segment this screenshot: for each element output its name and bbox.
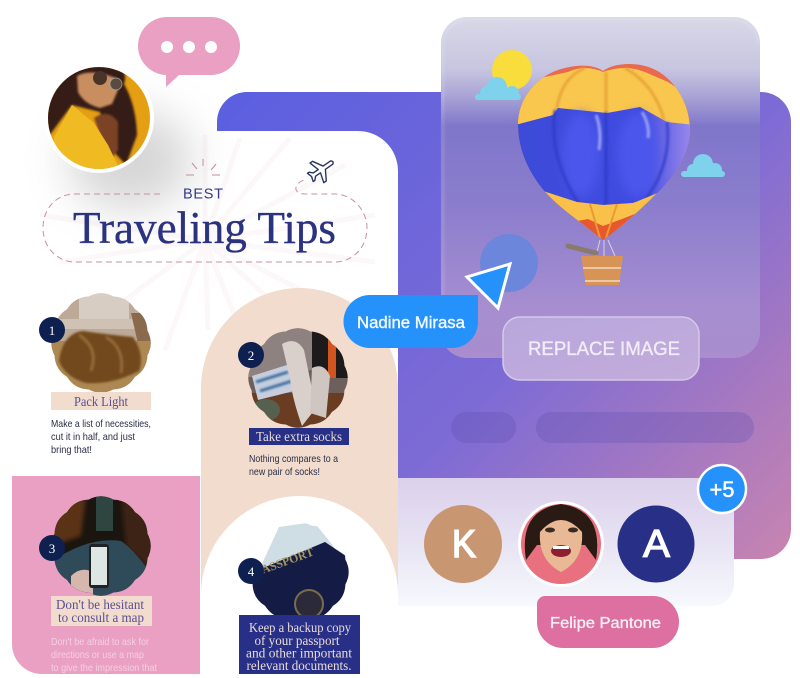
description: Don't be afraid to ask for	[51, 636, 149, 648]
label: keep a backup copy	[239, 615, 360, 674]
title sparkle	[186, 159, 220, 175]
description: bring that!	[51, 444, 92, 456]
panel: collaborators strip	[398, 478, 734, 606]
panel: pink tip background	[12, 476, 200, 674]
tip 4: backup passport	[238, 516, 360, 674]
number badge 1	[39, 317, 65, 343]
avatar: A: A	[643, 523, 670, 566]
description: new pair of socks!	[249, 466, 320, 478]
number badge 2: 2	[248, 348, 254, 363]
placeholder pill long	[536, 412, 754, 443]
label: pack light: Pack Light	[74, 394, 128, 409]
tip 3: consult a map	[39, 490, 157, 674]
telescope	[568, 246, 596, 253]
heading: traveling tips: Traveling Tips	[73, 202, 336, 253]
avatar: woman in yellow jacket	[44, 63, 154, 173]
icon: chat bubble	[138, 17, 240, 87]
sunburst rays behind title	[40, 135, 375, 350]
label: consult a map: Don't be hesitant	[56, 597, 144, 612]
name tag: nadine mirasa: Nadine Mirasa	[357, 313, 466, 332]
heading: best: BEST	[183, 186, 223, 202]
photo: phone on forest road	[54, 496, 151, 596]
description: Make a list of necessities,	[51, 418, 151, 430]
basket	[581, 256, 623, 285]
label: keep a backup copy: relevant documents.	[246, 658, 352, 673]
number badge 4	[238, 558, 264, 584]
description: to give the impression that	[51, 662, 157, 674]
name tag: felipe pantone	[537, 596, 679, 648]
description: Nothing compares to a	[249, 453, 338, 465]
photo: socks and book	[248, 328, 348, 428]
number badge 3: 3	[49, 541, 55, 556]
panel: frosted glass image card	[441, 17, 760, 358]
icon: sun	[492, 50, 532, 90]
avatar: K	[424, 505, 502, 583]
photo: passport and tickets	[252, 523, 349, 615]
label: consult a map	[51, 596, 152, 626]
description: directions or use a map	[51, 649, 144, 661]
description	[51, 418, 151, 456]
icon: airplane	[303, 152, 340, 187]
label: keep a backup copy: of your passport	[254, 633, 340, 648]
balloon envelope	[515, 60, 695, 245]
description	[51, 636, 157, 674]
avatar: K: K	[452, 523, 476, 566]
avatar shadow	[68, 110, 192, 210]
button: replace image	[503, 317, 699, 380]
label: consult a map: to consult a map	[58, 610, 144, 625]
panel: peach arch	[201, 288, 398, 678]
panel: white lower arch	[201, 496, 398, 678]
icon: cloud left	[475, 77, 521, 100]
number badge 1: 1	[49, 323, 55, 338]
badge: +5: +5	[709, 477, 735, 502]
panel: white infographic page	[0, 131, 398, 678]
dashed flight path	[43, 180, 367, 262]
photo: duffel bag	[51, 293, 151, 392]
tip 1: pack light	[39, 287, 157, 456]
title block	[43, 152, 367, 262]
cursor highlight circle	[480, 234, 538, 292]
number badge 2	[238, 342, 264, 368]
photo: passport and tickets: PASSPORT	[253, 545, 316, 579]
label: pack light	[51, 392, 151, 410]
ropes	[596, 240, 615, 256]
description: cut it in half, and just	[51, 431, 135, 443]
label: take extra socks: Take extra socks	[256, 429, 342, 444]
number badge 3	[39, 535, 65, 561]
icon: cloud right	[681, 154, 725, 177]
avatar: smiling woman	[518, 501, 604, 587]
badge: +5	[698, 465, 746, 513]
tip 2: take extra socks	[238, 322, 354, 478]
panel: purple editor background	[217, 92, 791, 559]
number badge 4: 4	[248, 564, 255, 579]
label: keep a backup copy: Keep a backup copy	[249, 620, 351, 635]
cursor arrow	[467, 264, 510, 308]
placeholder pill short	[451, 412, 516, 443]
button: replace image: REPLACE IMAGE	[528, 339, 680, 360]
description	[249, 453, 338, 478]
avatar: A	[618, 506, 694, 582]
label: keep a backup copy: and other important	[246, 646, 352, 660]
name tag: felipe pantone: Felipe Pantone	[550, 615, 661, 632]
illustration: hot air balloon	[515, 60, 695, 285]
name tag: nadine mirasa	[344, 295, 478, 348]
